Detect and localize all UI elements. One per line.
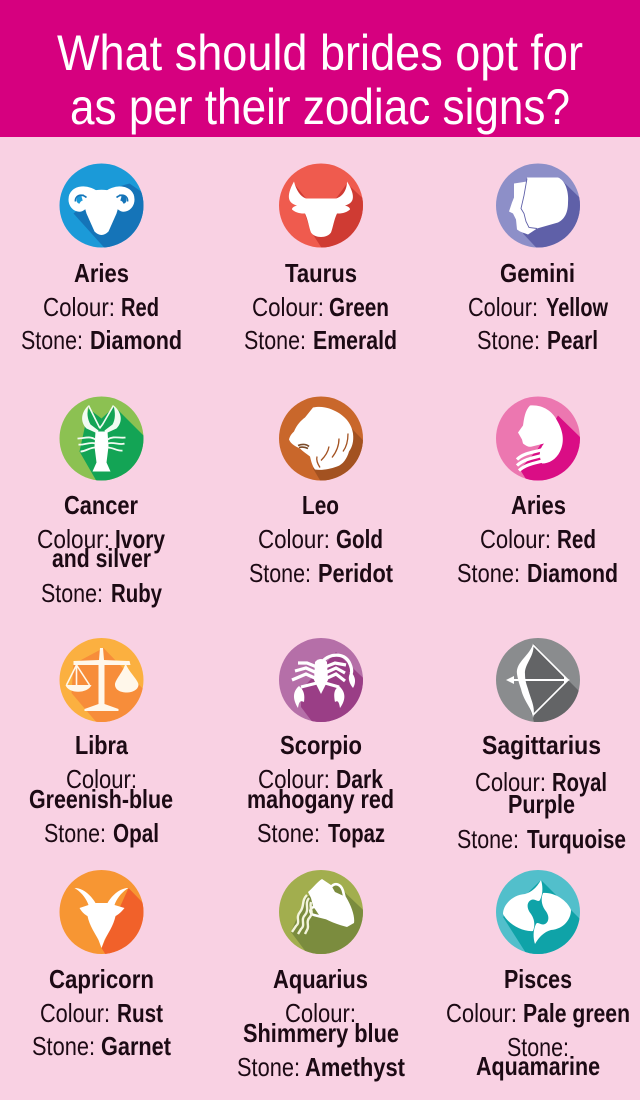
stone: Stone: — [249, 558, 311, 588]
colour — [252, 292, 389, 322]
stone — [21, 325, 182, 355]
stone — [244, 325, 397, 355]
stone: Emerald — [313, 325, 397, 355]
stone: Stone: — [32, 1031, 95, 1061]
panel: Leo — [249, 396, 393, 588]
stone — [457, 824, 626, 854]
stone — [44, 818, 159, 848]
colour — [40, 998, 163, 1028]
panel: Sagittarius — [457, 638, 626, 854]
colour: Gold — [336, 524, 383, 554]
name: Aries — [74, 258, 129, 288]
name: Aries — [511, 490, 566, 520]
colour: Colour: — [40, 998, 110, 1028]
colour: Greenish-blue — [29, 784, 173, 814]
icon: bull — [279, 164, 363, 248]
colour: Colour: — [252, 292, 324, 322]
stone: Ruby — [111, 578, 162, 608]
stone: Diamond — [527, 558, 618, 588]
title banner — [0, 0, 640, 137]
stone — [257, 818, 385, 848]
stone: Stone: — [41, 578, 103, 608]
colour: and silver — [52, 543, 151, 573]
colour: Colour: — [480, 524, 551, 554]
colour: mahogany red — [247, 784, 394, 814]
panel: Libra — [29, 638, 173, 848]
name: Pisces — [504, 964, 572, 994]
panel: Aquarius — [237, 870, 405, 1082]
stone: Aquamarine — [476, 1051, 600, 1081]
panel: Gemini — [468, 164, 609, 355]
stone: Stone: — [44, 818, 106, 848]
name: Scorpio — [280, 730, 362, 760]
panel: Taurus — [244, 164, 397, 355]
stone: Topaz — [328, 818, 385, 848]
icon: two fish — [496, 870, 580, 954]
colour — [446, 998, 630, 1028]
colour: Red — [121, 292, 159, 322]
colour — [475, 767, 607, 819]
stone — [476, 1032, 600, 1081]
icon: ram — [60, 164, 144, 248]
colour — [37, 524, 165, 573]
icon: bow and arrow — [496, 638, 580, 722]
colour: Shimmery blue — [243, 1018, 399, 1048]
stone: Opal — [113, 818, 159, 848]
panel: Cancer — [37, 396, 165, 608]
stone: Stone: — [21, 325, 83, 355]
stone: Stone: — [257, 818, 320, 848]
colour: Ivory — [115, 524, 165, 554]
icon: goat — [60, 870, 144, 954]
icon: lobster — [60, 396, 144, 480]
name: Gemini — [500, 258, 575, 288]
colour: Colour: — [468, 292, 538, 322]
colour: Colour: — [43, 292, 115, 322]
stone: Stone: — [237, 1052, 300, 1082]
stone: Peridot — [318, 558, 393, 588]
colour: Colour: — [475, 767, 546, 797]
colour: Colour: — [446, 998, 517, 1028]
icon: twin faces — [496, 164, 580, 248]
stone — [32, 1031, 171, 1061]
colour: Royal — [552, 767, 607, 797]
name: Sagittarius — [482, 730, 601, 760]
stone: Stone: — [507, 1032, 569, 1062]
colour: Colour: — [66, 764, 137, 794]
name: Capricorn — [49, 964, 154, 994]
colour — [258, 524, 383, 554]
colour: Rust — [117, 998, 163, 1028]
panel: Pisces — [446, 870, 630, 1081]
colour — [29, 764, 173, 814]
stone: Stone: — [457, 824, 519, 854]
panel: Scorpio — [247, 638, 394, 848]
stone — [237, 1052, 405, 1082]
stone — [249, 558, 393, 588]
colour: Yellow — [546, 292, 609, 322]
name: Cancer — [64, 490, 138, 520]
colour — [247, 764, 394, 814]
name: Aquarius — [273, 964, 368, 994]
stone: Amethyst — [305, 1052, 405, 1082]
panel: Aries — [21, 164, 182, 355]
colour: Dark — [336, 764, 383, 794]
icon: maiden — [496, 396, 580, 480]
stone: Garnet — [101, 1031, 171, 1061]
stone: Stone: — [457, 558, 520, 588]
name: Taurus — [285, 258, 357, 288]
name: Libra — [75, 730, 128, 760]
icon: lion — [279, 396, 363, 480]
icon: scorpion — [279, 638, 363, 722]
panel: Aries (second) — [457, 396, 618, 588]
colour: Colour: — [37, 524, 110, 554]
panel: Capricorn — [32, 870, 171, 1061]
stone — [457, 558, 618, 588]
colour: Colour: — [258, 524, 330, 554]
stone: Diamond — [90, 325, 182, 355]
stone: Stone: — [477, 325, 540, 355]
stone — [41, 578, 162, 608]
icon: scales — [60, 638, 144, 722]
colour — [243, 998, 399, 1048]
title banner: What should brides opt for — [57, 25, 583, 81]
stone — [477, 325, 598, 355]
stone: Stone: — [244, 325, 306, 355]
colour: Red — [557, 524, 596, 554]
title banner: as per their zodiac signs? — [70, 79, 570, 135]
name: Leo — [302, 490, 339, 520]
colour: Purple — [508, 789, 575, 819]
colour: Colour: — [285, 998, 356, 1028]
icon: water jug — [279, 870, 363, 954]
colour — [468, 292, 609, 322]
stone: Pearl — [547, 325, 598, 355]
colour: Colour: — [258, 764, 330, 794]
colour: Green — [329, 292, 389, 322]
